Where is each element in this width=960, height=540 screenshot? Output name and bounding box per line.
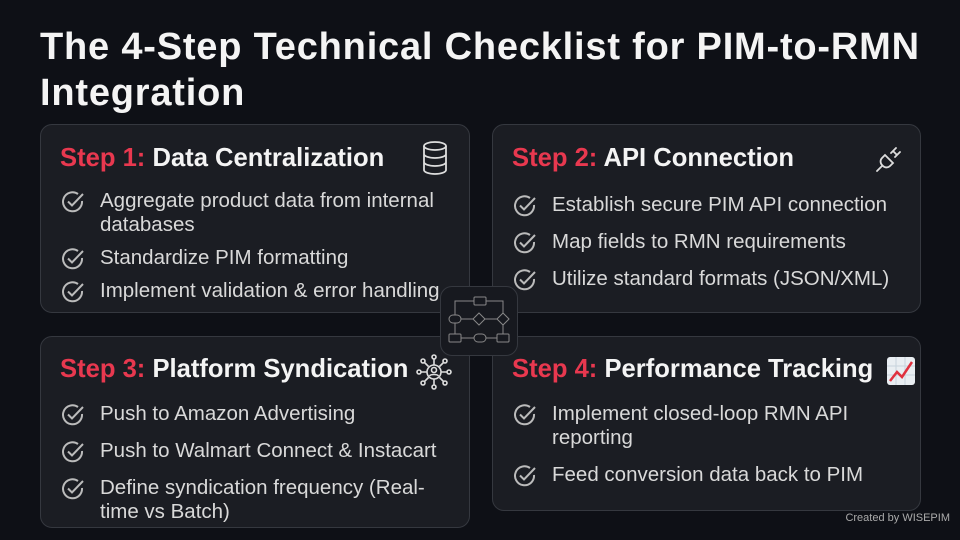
checklist step 4: Feed conversion data back to PIM [552, 463, 863, 486]
checklist step 1: Aggregate product data from internal databases [100, 189, 434, 236]
checklist step 4: Implement closed-loop RMN API reporting [552, 402, 848, 449]
title: The 4-Step Technical Checklist for PIM-to-RMN [40, 26, 920, 68]
checklist step 1: Standardize PIM formatting [100, 246, 348, 269]
checklist step 4 [514, 402, 863, 486]
checklist step 2: Establish secure PIM API connection [552, 193, 887, 216]
icon: database [423, 141, 447, 175]
checklist step 3: time vs Batch) [100, 500, 230, 523]
checklist step 3: Push to Walmart Connect & Instacart [100, 439, 436, 462]
icon: center flowchart [440, 286, 518, 356]
heading step 3: Step 3: Platform Syndication [60, 355, 408, 383]
checklist step 1: Implement validation & error handling [100, 279, 440, 302]
heading step 2: Step 2: API Connection [512, 144, 794, 172]
checklist step 2 [514, 193, 889, 290]
checklist step 3 [62, 402, 436, 523]
checklist step 3: Push to Amazon Advertising [100, 402, 355, 425]
icon: network [416, 354, 452, 390]
checklist step 3: Define syndication frequency (Real- [100, 476, 425, 499]
panel: step 4 [492, 336, 921, 511]
icon: chart [887, 357, 915, 385]
title [40, 26, 920, 114]
panel: step 3 [40, 336, 470, 528]
checklist step 2: Map fields to RMN requirements [552, 230, 846, 253]
heading step 4: Step 4: Performance Tracking [512, 355, 873, 383]
panel: step 1 [40, 124, 470, 313]
panel: step 2 [492, 124, 921, 313]
title: Integration [40, 72, 245, 114]
checklist step 2: Utilize standard formats (JSON/XML) [552, 267, 889, 290]
heading step 1: Step 1: Data Centralization [60, 144, 384, 172]
checklist step 1 [62, 189, 440, 302]
credit: Created by WISEPIM [845, 512, 950, 524]
icon: plug [876, 147, 901, 172]
